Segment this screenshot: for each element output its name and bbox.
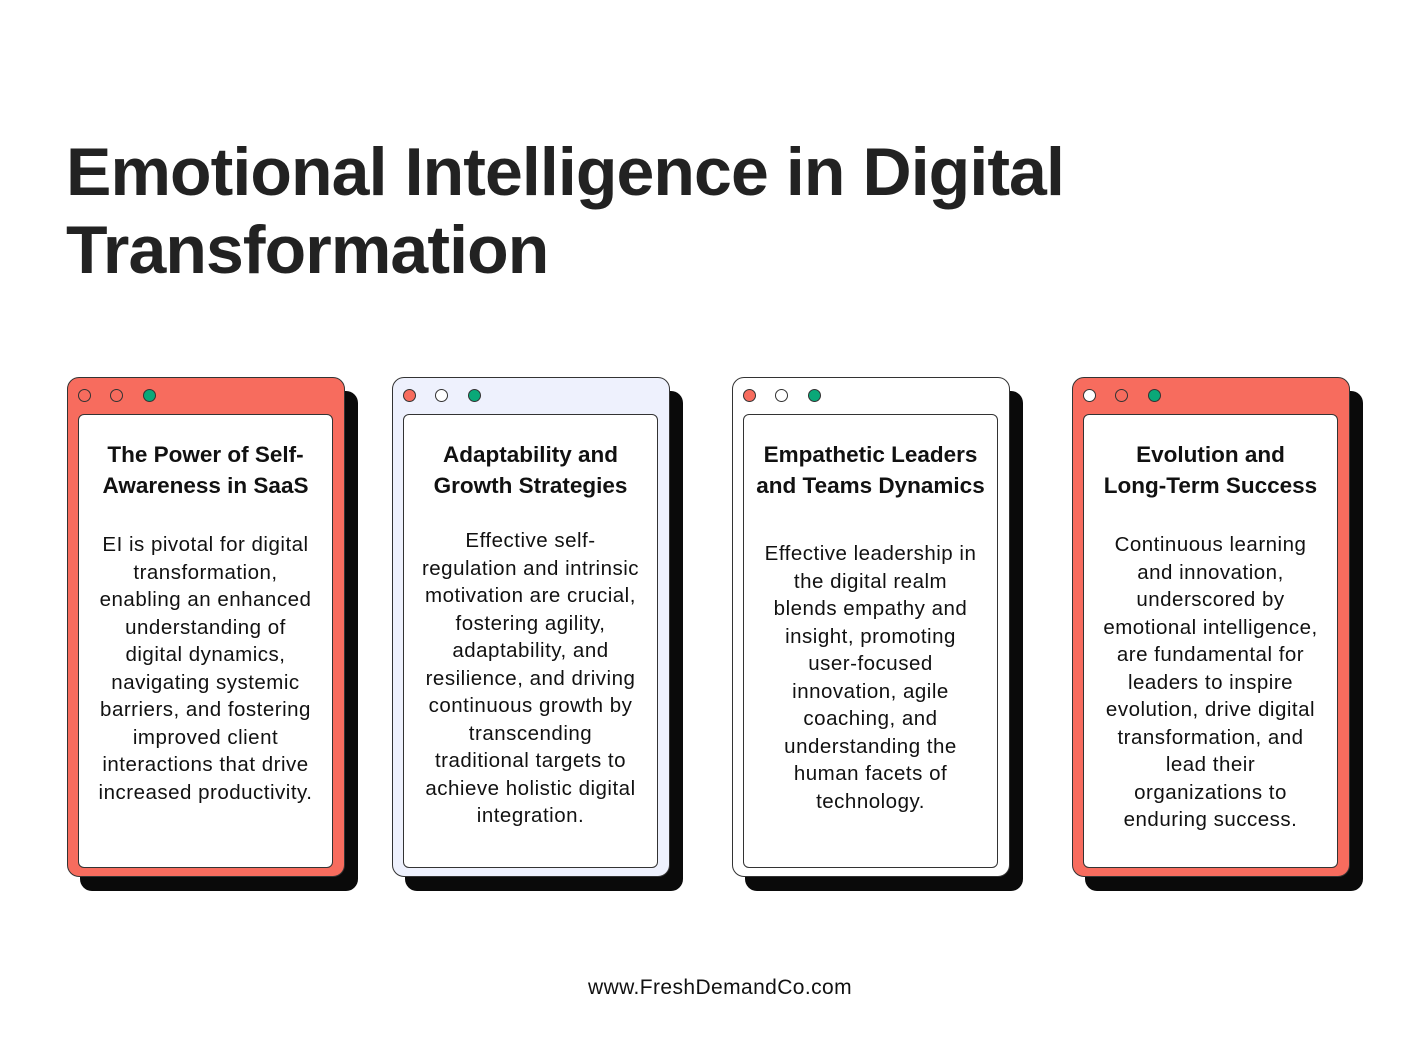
card text: fostering agility, — [456, 612, 605, 634]
title: Transformation — [66, 212, 548, 288]
card text: barriers, and fostering — [100, 698, 311, 721]
card text — [403, 414, 658, 868]
card text: Awareness in SaaS — [103, 473, 308, 498]
card text: understanding the — [784, 734, 957, 758]
card text: leaders to inspire — [1128, 670, 1293, 694]
card text: interactions that drive — [102, 753, 309, 776]
card text: Growth Strategies — [434, 473, 627, 498]
footer url: www.FreshDemandCo.com — [588, 976, 852, 999]
card text: the digital realm — [794, 570, 947, 592]
card text: blends empathy and — [774, 597, 967, 620]
card text: organizations to — [1134, 780, 1287, 804]
card text: evolution, drive digital — [1106, 698, 1315, 721]
card text: enduring success. — [1124, 808, 1297, 831]
card text: improved client — [133, 726, 278, 748]
card text — [743, 414, 998, 868]
card text: human facets of — [794, 762, 947, 785]
card text: Long-Term Success — [1104, 473, 1317, 498]
card text: underscored by — [1136, 588, 1285, 611]
card text: emotional intelligence, — [1103, 616, 1318, 638]
card text: and innovation, — [1137, 560, 1284, 584]
card text: achieve holistic digital — [425, 776, 636, 800]
title — [66, 134, 1064, 288]
card text: innovation, agile — [792, 680, 949, 702]
card text: transcending — [469, 722, 592, 744]
card text: Effective self- — [465, 529, 596, 552]
card text: Continuous learning — [1115, 533, 1306, 556]
card text: transformation, — [133, 560, 278, 584]
card text: navigating systemic — [111, 670, 300, 694]
card text: increased productivity. — [99, 780, 312, 804]
card text: traditional targets to — [435, 749, 626, 772]
card text: Empathetic Leaders — [764, 442, 977, 467]
card text: insight, promoting — [785, 624, 956, 648]
card text: transformation, and — [1117, 726, 1304, 748]
panel: empathetic leaders — [732, 377, 1023, 891]
card text — [78, 414, 333, 868]
panel: adaptability — [392, 377, 683, 891]
panel: self-awareness — [67, 377, 358, 891]
card text: digital dynamics, — [125, 643, 286, 666]
card text: regulation and intrinsic — [422, 556, 639, 580]
card text: are fundamental for — [1117, 643, 1304, 666]
card text: Effective leadership in — [765, 542, 976, 565]
title: Emotional Intelligence in Digital — [66, 134, 1064, 210]
card text: Evolution and — [1136, 442, 1285, 467]
card text — [1083, 414, 1338, 868]
card text: and Teams Dynamics — [756, 473, 985, 498]
card text: continuous growth by — [429, 694, 632, 717]
card text: technology. — [816, 790, 925, 812]
card text: understanding of — [125, 616, 286, 638]
card text: The Power of Self- — [107, 442, 304, 467]
card text: enabling an enhanced — [100, 588, 311, 611]
card text: user-focused — [808, 652, 933, 675]
card text: adaptability, and — [452, 639, 609, 662]
card text: coaching, and — [803, 707, 938, 730]
card text: Adaptability and — [443, 442, 618, 467]
card text: motivation are crucial, — [425, 584, 636, 607]
card text: integration. — [477, 804, 584, 827]
card text: EI is pivotal for digital — [102, 533, 309, 556]
card text: lead their — [1166, 753, 1255, 776]
card text: resilience, and driving — [426, 666, 635, 690]
panel: evolution — [1072, 377, 1363, 891]
